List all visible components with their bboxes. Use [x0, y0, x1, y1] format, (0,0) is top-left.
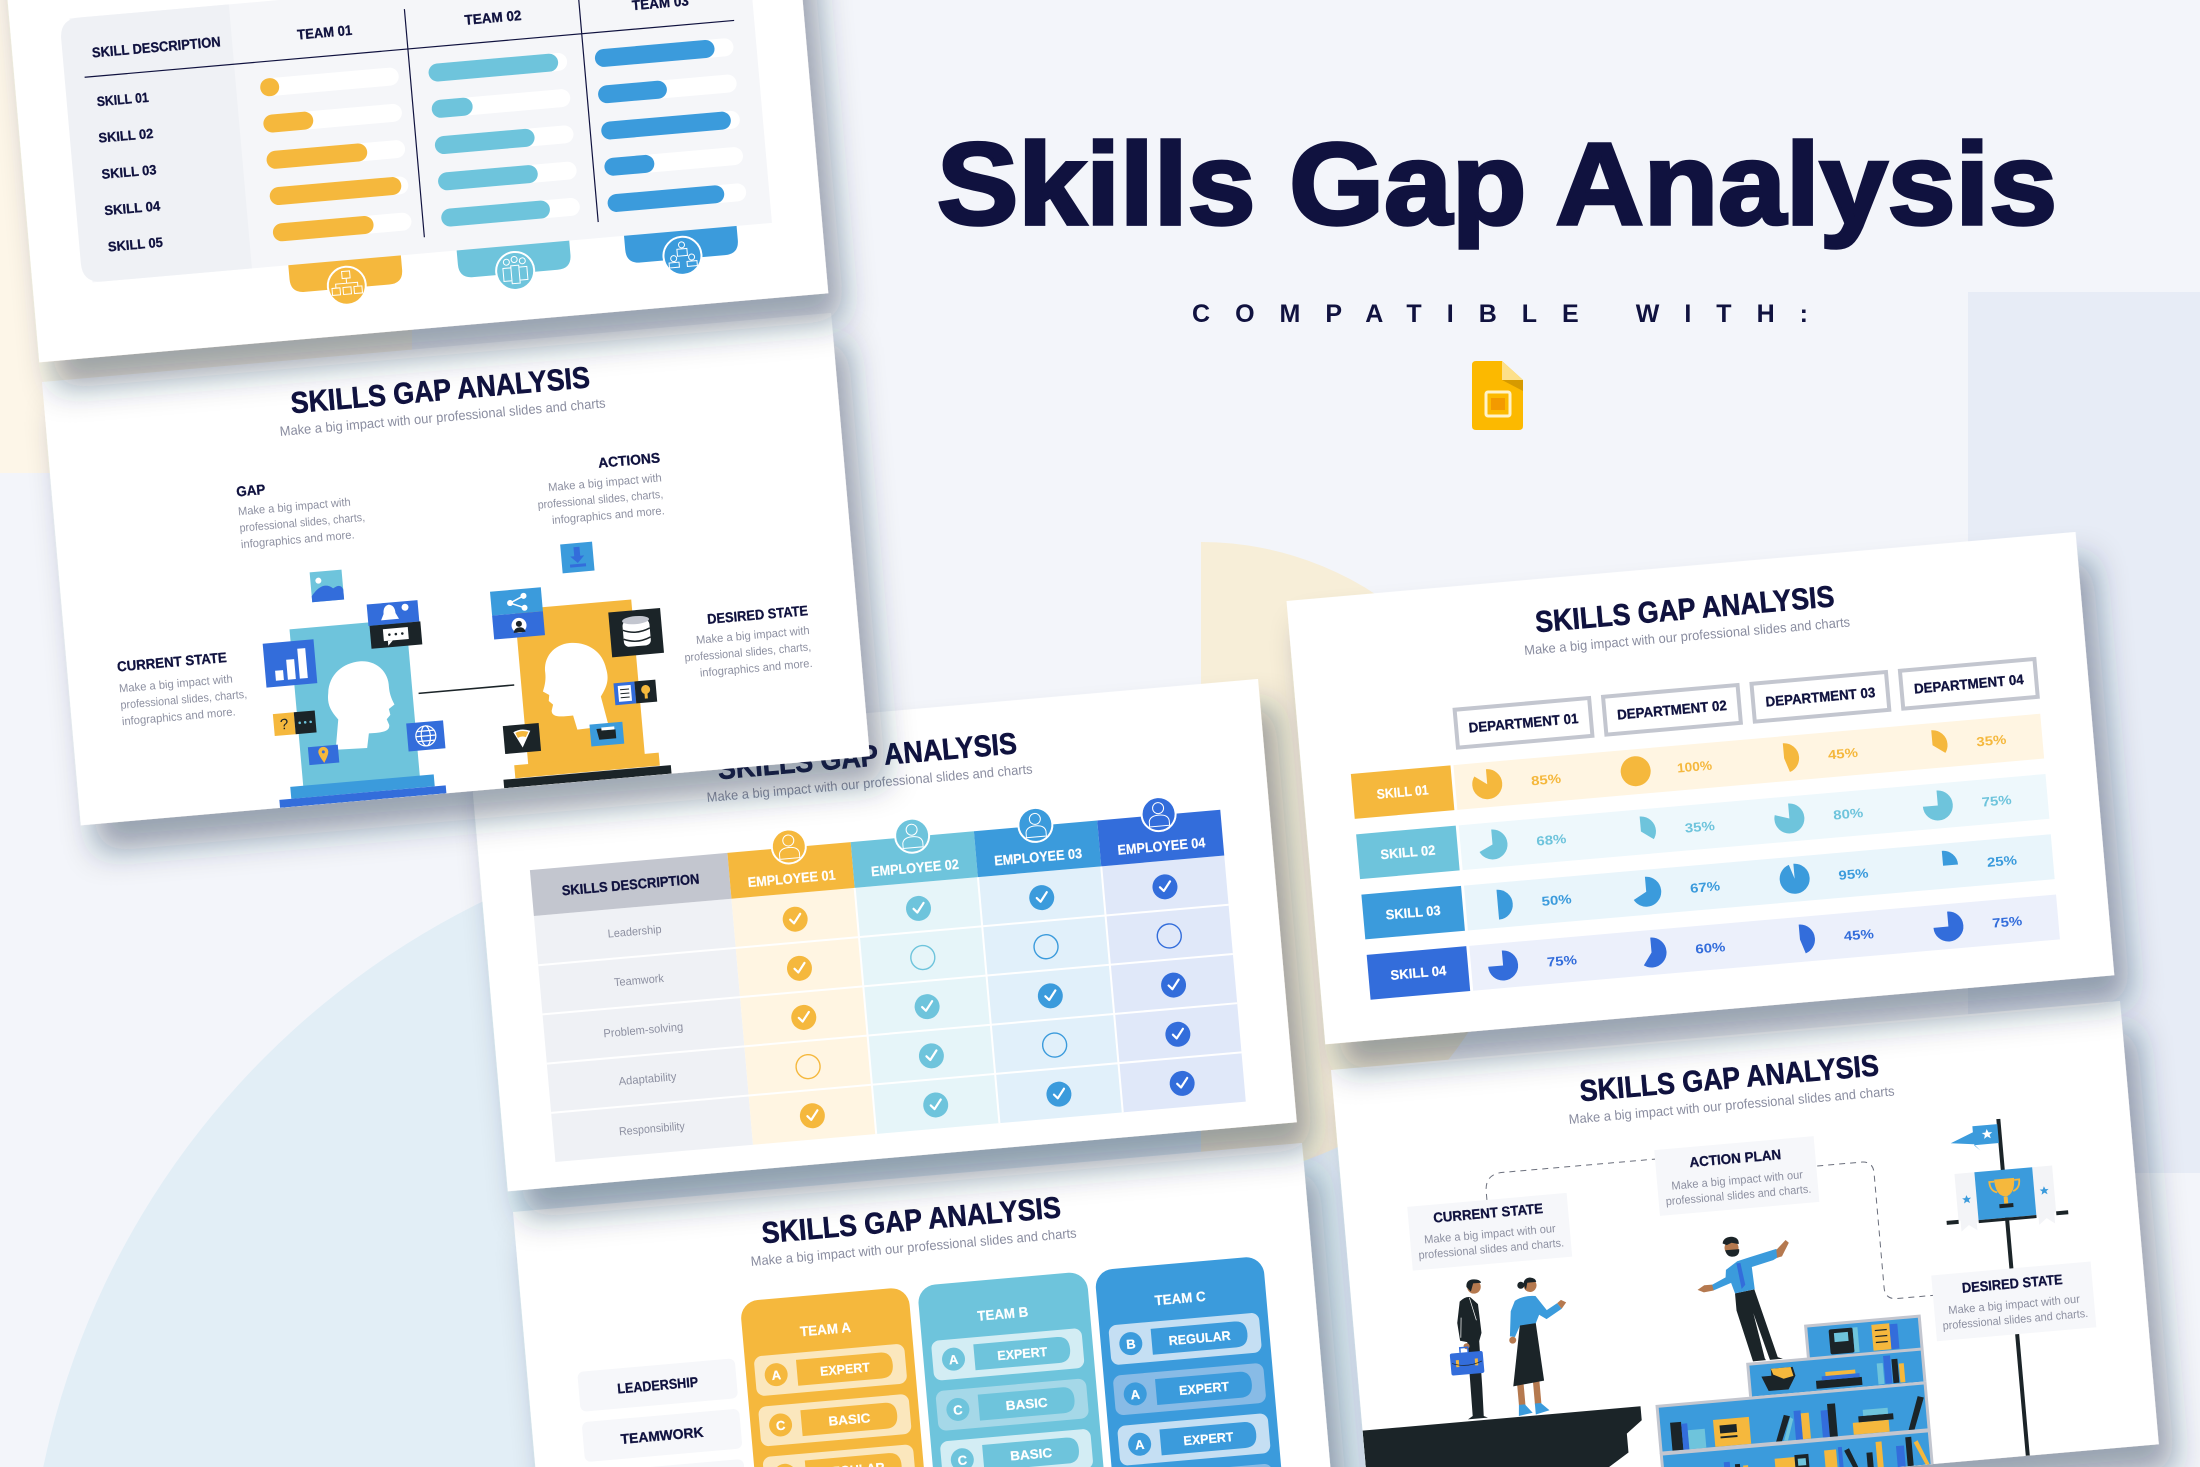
text block: gap: Make a big impact with — [238, 497, 351, 518]
row: skill 02: 80% — [1833, 805, 1864, 823]
compatible with label: COMPATIBLE WITH: — [1192, 300, 1808, 328]
department headers: DEPARTMENT 01 — [1468, 710, 1579, 736]
check marks: employee 01 — [782, 906, 826, 1129]
icon: bar chart — [263, 639, 317, 688]
column: team A: C — [775, 1418, 787, 1433]
row: skill 03: SKILL 03 — [1385, 903, 1442, 923]
header: skills description: SKILLS DESCRIPTION — [561, 870, 700, 898]
skill label: teamwork — [582, 1409, 742, 1462]
column headers: TEAM 01 — [297, 22, 353, 43]
bars: team 03 — [594, 38, 747, 213]
card: desired state: DESIRED STATE — [1961, 1271, 2063, 1296]
slide title: SKILLS GAP ANALYSIS — [289, 361, 591, 420]
column: team C: A — [1130, 1387, 1141, 1402]
footer tab: team 01 — [288, 250, 405, 310]
desired state column with head — [489, 597, 672, 788]
card: action plan: professional slides and charts. — [1665, 1184, 1812, 1208]
text block: actions: infographics and more. — [552, 505, 665, 527]
row: skill 01: 100% — [1676, 758, 1713, 776]
flag — [1949, 1124, 1999, 1153]
column: team C: EXPERT — [1178, 1379, 1230, 1398]
column: team C — [1094, 1256, 1292, 1467]
flag pole — [1996, 1119, 2030, 1456]
column: team C: EXPERT — [1183, 1429, 1234, 1448]
department headers: DEPARTMENT 04 — [1913, 671, 2025, 697]
skill label: leadership: LEADERSHIP — [617, 1374, 699, 1397]
slide subtitle: Make a big impact with our professional slides and charts — [1524, 614, 1851, 658]
row labels: Leadership — [607, 924, 662, 941]
row: skill 03: 50% — [1541, 891, 1573, 909]
current state column with head — [265, 617, 446, 808]
column: team C: A — [1134, 1437, 1146, 1453]
bars: team 02 — [428, 52, 581, 227]
row labels: Adaptability — [618, 1071, 677, 1088]
row: skill 02: 35% — [1684, 818, 1716, 836]
slide subtitle: Make a big impact with our professional slides and charts — [1568, 1083, 1895, 1127]
column: team A — [740, 1287, 937, 1467]
header: employee 02 — [849, 813, 978, 888]
icon: google slides — [1472, 361, 1523, 430]
slide title: SKILLS GAP ANALYSIS — [716, 727, 1018, 786]
trophy banner — [1942, 1164, 2069, 1233]
text block: gap: professional slides, charts, — [239, 512, 366, 535]
check marks: employee 03 — [1028, 884, 1072, 1108]
row: skill 03: 25% — [1986, 852, 2018, 870]
row: skill 04: 45% — [1843, 926, 1875, 944]
card: current state: professional slides and charts. — [1418, 1237, 1565, 1262]
card: desired state: Make a big impact with our — [1948, 1294, 2081, 1317]
text block: desired state: DESIRED STATE — [706, 602, 809, 627]
text block: actions: ACTIONS — [597, 449, 661, 471]
card: action plan — [1654, 1136, 1819, 1216]
column headers: SKILL DESCRIPTION — [91, 33, 221, 61]
check marks: employee 04 — [1151, 873, 1196, 1097]
person: man with briefcase — [1443, 1279, 1493, 1420]
column: team C: B — [1126, 1336, 1136, 1352]
header: employee 03: EMPLOYEE 03 — [994, 845, 1083, 869]
card: current state: Make a big impact with our — [1424, 1223, 1556, 1246]
row: skill 04 — [1367, 895, 2060, 1000]
header: skills description — [530, 853, 731, 916]
card: desired state: professional slides and charts. — [1942, 1308, 2089, 1333]
skill labels: SKILL 05 — [107, 235, 164, 254]
header: employee 02: EMPLOYEE 02 — [870, 856, 960, 879]
footer tab: team 02 — [456, 236, 573, 295]
column: team C: REGULAR — [1168, 1328, 1232, 1348]
column headers — [91, 0, 690, 61]
skill labels: SKILL 03 — [101, 162, 158, 182]
department headers: DEPARTMENT 03 — [1765, 684, 1876, 710]
slide subtitle: Make a big impact with our professional slides and charts — [706, 761, 1033, 805]
header: employee 03 — [972, 803, 1101, 877]
column: team B: A — [948, 1352, 959, 1368]
column: team B: BASIC — [1005, 1395, 1049, 1413]
text block: gap: GAP — [236, 481, 266, 499]
text block: current state: infographics and more. — [121, 706, 236, 728]
card: current state — [1407, 1193, 1572, 1271]
row: skill 02 — [1356, 774, 2049, 879]
icon: location pin — [308, 745, 339, 765]
slide: department pie table — [1286, 532, 2114, 1044]
connector line — [419, 685, 514, 693]
department headers: DEPARTMENT 02 — [1616, 697, 1728, 723]
row: skill 04: 75% — [1546, 952, 1578, 970]
slide: employee skills table — [469, 679, 1297, 1191]
column: team C: TEAM C — [1154, 1288, 1206, 1308]
row labels — [604, 925, 684, 1136]
skill labels — [94, 90, 164, 254]
text block: desired state — [681, 602, 813, 681]
column headers: TEAM 02 — [464, 7, 522, 28]
row: skill 02: 68% — [1536, 831, 1567, 849]
text block: current state: CURRENT STATE — [116, 649, 227, 675]
icon: database — [608, 608, 664, 657]
text block: desired state: professional slides, charts, — [684, 641, 812, 665]
icon: document and bulb — [613, 680, 657, 705]
bookshelf — [1650, 1315, 1934, 1467]
text block: actions: Make a big impact with — [548, 472, 662, 494]
row: skill 03 — [1361, 834, 2055, 939]
card: current state: CURRENT STATE — [1433, 1200, 1544, 1226]
slide subtitle: Make a big impact with our professional slides and charts — [750, 1225, 1077, 1269]
skill labels: SKILL 04 — [104, 198, 161, 218]
card: action plan: Make a big impact with our — [1671, 1169, 1804, 1193]
text block: desired state: Make a big impact with — [696, 625, 810, 647]
row: skill 04: SKILL 04 — [1390, 963, 1447, 983]
icon: download — [560, 542, 595, 573]
column: team B: BASIC — [1010, 1445, 1053, 1464]
card: desired state — [1931, 1261, 2096, 1341]
column: team A: BASIC — [828, 1410, 872, 1429]
row labels: Problem-solving — [603, 1021, 684, 1040]
dashed path — [1485, 1136, 1933, 1333]
cliff — [1363, 1406, 1648, 1467]
text block: current state — [116, 647, 249, 728]
icon: pie slice — [503, 723, 541, 754]
text block: current state: professional slides, charts, — [120, 689, 248, 712]
column: team B: TEAM B — [977, 1303, 1029, 1324]
text block: actions: professional slides, charts, — [537, 489, 664, 512]
column: team B: EXPERT — [997, 1344, 1048, 1363]
department headers — [1455, 659, 2038, 748]
header: employee 04: EMPLOYEE 04 — [1117, 834, 1206, 858]
skill label: teamwork: TEAMWORK — [620, 1424, 704, 1447]
skill label: third row — [656, 1460, 744, 1467]
row labels: Teamwork — [614, 973, 665, 989]
row: skill 01: 85% — [1530, 771, 1562, 788]
text block: gap — [236, 484, 364, 549]
skill labels: SKILL 02 — [98, 126, 154, 146]
card: action plan: ACTION PLAN — [1689, 1146, 1782, 1170]
header: employee 01 — [726, 824, 855, 899]
icon: bell and chat — [367, 600, 422, 649]
header: employee 04 — [1096, 792, 1224, 866]
icon: share and person — [490, 587, 545, 640]
text block: desired state: infographics and more. — [699, 658, 813, 680]
text block: current state: Make a big impact with — [119, 674, 233, 695]
person: woman — [1504, 1274, 1576, 1416]
slide: action plan illustration — [1331, 1001, 2159, 1467]
row: skill 04: 60% — [1695, 939, 1726, 957]
column: team A: EXPERT — [819, 1359, 871, 1379]
slide: team skill bars — [0, 0, 828, 362]
column: team A: A — [771, 1367, 782, 1383]
text block: gap: infographics and more. — [240, 529, 355, 551]
header: employee 01: EMPLOYEE 01 — [747, 867, 836, 890]
slide subtitle: Make a big impact with our professional slides and charts — [279, 395, 606, 439]
icon: image — [310, 570, 344, 602]
icon: question and dots — [273, 710, 317, 736]
slide: teams and skill levels (bottom) — [513, 1143, 1341, 1467]
text block: actions — [538, 452, 664, 525]
row: skill 01: 45% — [1827, 745, 1859, 762]
slide: current and desired state heads — [42, 313, 870, 825]
row: skill 02: 75% — [1981, 792, 2013, 810]
icon: globe — [406, 720, 445, 751]
check marks: employee 02 — [905, 895, 949, 1119]
row: skill 01: SKILL 01 — [1376, 782, 1430, 802]
row: skill 04: 75% — [1992, 913, 2023, 931]
column: team B: C — [953, 1402, 964, 1418]
slide title: SKILLS GAP ANALYSIS — [760, 1191, 1062, 1250]
slide title: SKILLS GAP ANALYSIS — [1534, 580, 1836, 639]
row: skill 03: 67% — [1689, 878, 1721, 896]
bars: team 01 — [259, 67, 412, 242]
footer tab: team 03 — [624, 221, 740, 280]
row: skill 03: 95% — [1838, 865, 1870, 883]
icon: question and dots: ? — [279, 716, 289, 734]
table panel — [59, 0, 772, 283]
row: skill 01: 35% — [1976, 732, 2007, 749]
column: team A: TEAM A — [799, 1319, 852, 1339]
row labels: Responsibility — [619, 1121, 686, 1138]
skill labels: SKILL 01 — [96, 90, 150, 109]
slide title: SKILLS GAP ANALYSIS — [1578, 1049, 1880, 1108]
column: team B — [917, 1271, 1116, 1467]
skill label: leadership — [577, 1358, 738, 1412]
row: skill 02: SKILL 02 — [1380, 843, 1436, 862]
table body — [534, 856, 1246, 1162]
person: presenter — [1693, 1232, 1799, 1366]
main title: Skills Gap Analysis — [937, 119, 2057, 249]
row: skill 01 — [1351, 714, 2044, 819]
icon: folder — [589, 722, 624, 746]
